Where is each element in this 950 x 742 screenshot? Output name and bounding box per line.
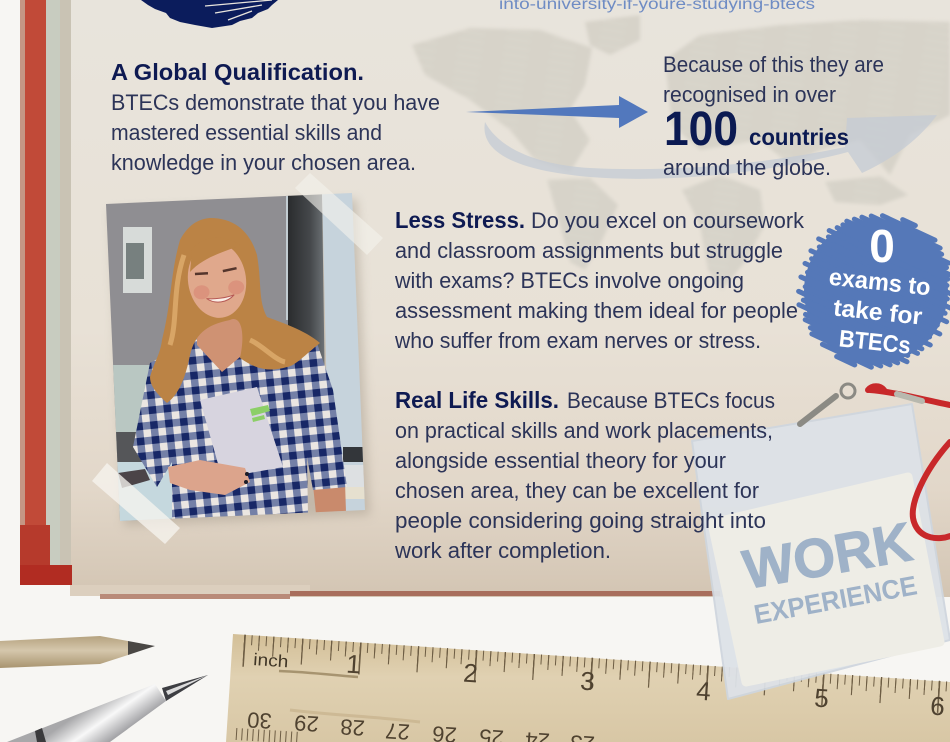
text block: real life skills [394,387,775,563]
text block: global qualification: knowledge in your chosen area. [111,150,416,175]
ruler inch label: inch [253,650,289,671]
callout: 100 countries: 100 [664,103,738,156]
text block: real life skills: work after completion. [394,538,611,563]
pencil [0,636,155,668]
text block: global qualification: BTECs demonstrate that you have [111,90,440,115]
lanyard cord and clip [800,384,950,538]
badge subheading: EXPERIENCE [752,570,919,630]
ruler number marks [246,649,946,742]
top scribble circle fragment [141,0,278,28]
ruler number marks: 5 [813,683,830,713]
world map watermark [412,15,950,290]
callout: 100 countries: Because of this they are [663,52,884,77]
heading: a global qualification: A Global Qualification. [111,59,364,85]
callout: 100 countries: countries [749,124,849,150]
ruler number marks: 28 [339,714,366,741]
text block: less stress: who suffer from exam nerves or stress. [394,328,761,353]
text block: less stress [394,207,805,353]
text block: less stress: assessment making them ideal for people [395,298,798,323]
tape: bottom left of photo [92,463,180,544]
badge heading: WORK [738,510,917,601]
callout: 100 countries: recognised in over [663,82,836,107]
ruler number marks: 29 [293,710,320,737]
ruler number marks: 30 [246,707,273,734]
text block: global qualification: mastered essential skills and [111,120,382,145]
swoosh arrow around globe [484,115,937,179]
stat badge: 0 exams [775,190,950,392]
ruler number marks: 4 [695,676,712,706]
ruler [226,634,950,742]
stat badge: 0 exams: 0 [869,220,895,272]
work experience badge [692,404,950,699]
stat badge: 0 exams: BTECs [838,325,912,360]
text block: less stress: Less Stress. [395,207,525,233]
callout: 100 countries [663,52,884,180]
callout: 100 countries: around the globe. [663,155,831,180]
text block: less stress: with exams? BTECs involve ongoing [394,268,744,293]
tape: top right of photo [295,173,383,255]
photo: student holding results [100,190,370,530]
text block: real life skills: chosen area, they can be excellent for [395,478,759,503]
ruler number marks: 3 [579,666,596,696]
text block: real life skills: Because BTECs focus [567,388,775,413]
ruler number marks: 6 [929,691,946,721]
text block: less stress: Do you excel on coursework [531,208,805,233]
text block: real life skills: Real Life Skills. [395,387,559,413]
arrow [466,96,648,128]
ruler number marks: 1 [345,649,362,679]
pen [7,675,208,742]
text block: real life skills: on practical skills and work placements, [395,418,773,443]
stat badge: 0 exams: exams to [828,264,932,301]
text block: less stress: and classroom assignments but struggle [395,238,783,263]
text block: real life skills: people considering going straight into [395,508,766,533]
ruler number marks: 2 [462,658,479,688]
stat badge: 0 exams: take for [832,294,923,331]
text block: real life skills: alongside essential theory for your [395,448,726,473]
text block: global qualification [111,90,440,175]
